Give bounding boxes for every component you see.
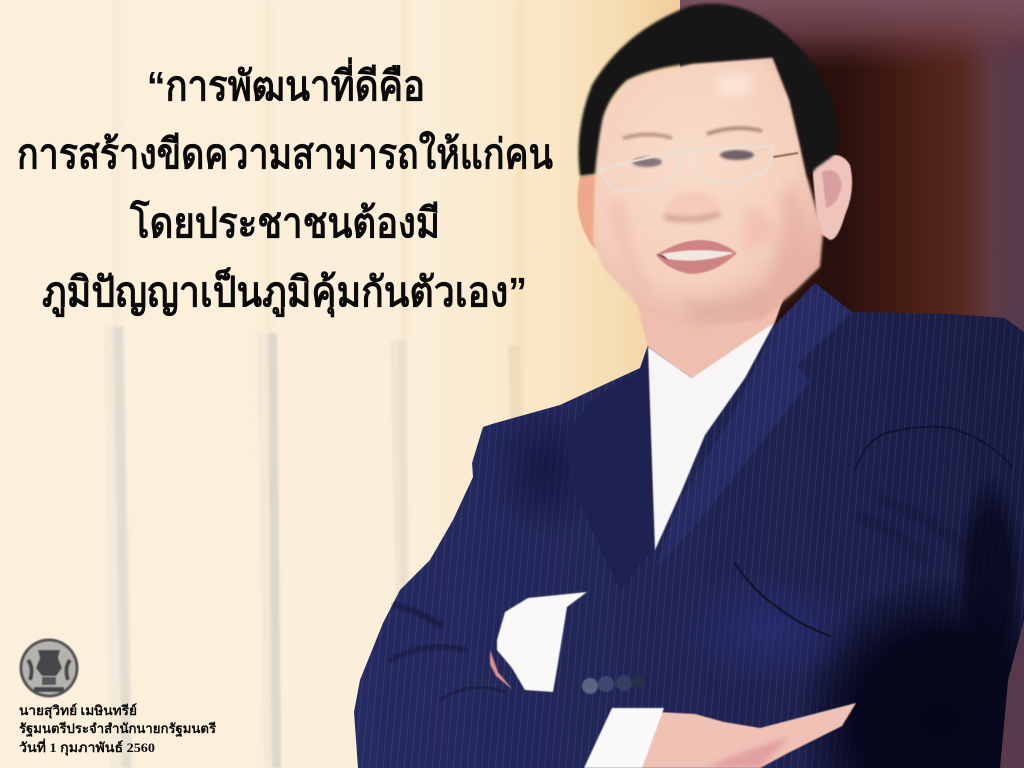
person: glasses bbox=[600, 146, 798, 191]
person: face shading bbox=[610, 75, 808, 322]
attribution: date: วันที่ 1 กุมภาพันธ์ 2560 bbox=[19, 738, 155, 756]
person: nose bbox=[662, 190, 722, 221]
background: dark wood panel bbox=[680, 0, 1024, 768]
person: mouth bbox=[656, 240, 737, 274]
person: shirt bbox=[648, 322, 775, 550]
person: suit jacket bbox=[354, 283, 1024, 768]
person: eyebrows and eyes bbox=[623, 128, 762, 167]
shading on jacket bbox=[485, 400, 1024, 768]
person: hair bbox=[578, 4, 838, 178]
right lapel bbox=[655, 283, 852, 568]
attribution: position: รัฐมนตรีประจำสำนักนายกรัฐมนตรี bbox=[19, 721, 216, 738]
background: cream cupboard wall bbox=[0, 0, 690, 768]
person: face bbox=[593, 57, 823, 326]
icon: government seal bbox=[20, 638, 78, 698]
quote line 2: การสร้างขีดความสามารถให้แก่คน bbox=[17, 130, 553, 177]
quote line 4: ภูมิปัญญาเป็นภูมิคุ้มกันตัวเอง” bbox=[42, 267, 527, 318]
person: cuff buttons bbox=[582, 674, 645, 694]
cupboard handles bbox=[104, 326, 522, 768]
attribution: name: นายสุวิทย์ เมษินทรีย์ bbox=[19, 703, 137, 719]
quote line 3: โดยประชาชนต้องมี bbox=[129, 199, 440, 246]
quote heading bbox=[17, 57, 553, 318]
left lapel bbox=[566, 348, 654, 590]
quote line 1: “การพัฒนาที่ดีคือ bbox=[147, 57, 425, 109]
person: ears bbox=[578, 155, 852, 250]
person: neck bbox=[636, 280, 790, 384]
person: shirt cuff bbox=[497, 592, 587, 692]
right-arm folds bbox=[390, 427, 1012, 700]
person: hand below arm bbox=[490, 650, 856, 768]
attribution text bbox=[19, 703, 216, 756]
